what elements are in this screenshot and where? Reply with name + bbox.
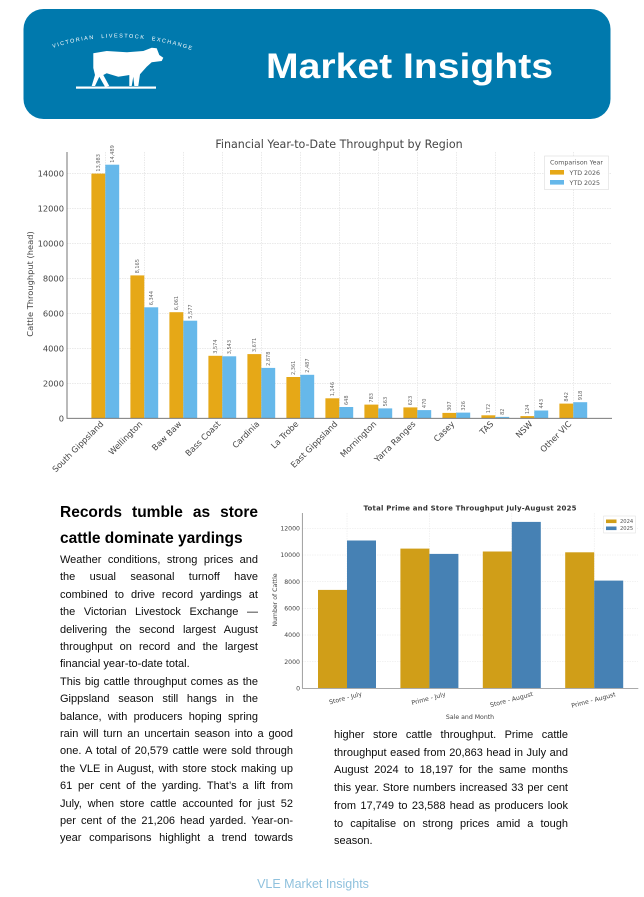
x axis labels: [328, 691, 617, 710]
y axis ticks: 4000: [43, 343, 64, 353]
value labels: 14,489: [110, 145, 116, 163]
x axis region labels: Casey: [432, 419, 456, 444]
article text: left column upper: throughput on record and the largest: [60, 641, 258, 653]
value labels: 648: [344, 395, 350, 405]
y axis ticks: 2000: [43, 378, 64, 388]
article text: left column upper: the Victorian Livestock Exchange —: [60, 606, 258, 618]
x axis region labels: La Trobe: [269, 419, 300, 451]
article text: left column lower: one. A total of 20,579 cattle were sold through: [60, 745, 293, 757]
y axis ticks: 10000: [38, 238, 64, 248]
article text: right column: August 2024 to 18,197 for the same months: [334, 764, 568, 776]
footer: VLE Market Insights: [257, 877, 369, 891]
x axis labels: Store - August: [489, 691, 534, 709]
y axis ticks: 0: [296, 686, 300, 692]
article text: right column: [334, 729, 568, 847]
value labels: 1,146: [330, 382, 336, 396]
legend: 2025: [620, 526, 633, 532]
bar chart: total prime and store throughput: [272, 504, 638, 721]
article text: left column upper: delivering the second largest August: [60, 624, 258, 636]
y axis ticks: 6000: [43, 308, 64, 318]
y axis ticks: 8000: [284, 579, 300, 586]
value labels: 623: [408, 396, 414, 405]
value labels: 2,878: [266, 352, 272, 366]
article text: left column lower: rain will turn an uncertain season into a good: [60, 728, 293, 740]
value labels: 13,983: [96, 154, 102, 172]
x axis region labels: [50, 418, 574, 474]
article heading: Records tumble as store: [60, 504, 258, 521]
y axis ticks: 4000: [284, 632, 300, 639]
value labels: 563: [383, 397, 389, 406]
legend: Comparison Year: [550, 160, 603, 166]
legend: 2024: [620, 519, 634, 525]
article text: left column lower: [60, 728, 293, 844]
article text: left column upper: financial year-to-date total.: [60, 658, 190, 670]
value labels: 783: [369, 393, 375, 403]
value labels: 842: [564, 392, 570, 402]
x axis region labels: Mornington: [338, 419, 378, 459]
y axis ticks: 6000: [284, 606, 300, 612]
value labels: 124: [525, 405, 531, 414]
article text: left column lower: per cent of the 21,206 head yarded. Year-on-: [60, 815, 293, 827]
x axis labels: Prime - August: [571, 691, 617, 710]
x axis region labels: Baw Baw: [150, 419, 184, 453]
value labels: 3,574: [213, 339, 219, 354]
article text: left column lower: 61 per cent of the yarding. That’s a lift from: [60, 780, 293, 792]
bars: YTD 2025: [105, 165, 587, 418]
value labels: 6,344: [149, 291, 155, 305]
article heading: [60, 504, 258, 547]
article text: left column lower: year comparisons highlight a trend towards: [60, 832, 293, 844]
y axis ticks: 12000: [280, 526, 300, 532]
legend: [604, 516, 636, 533]
value labels: 307: [447, 401, 453, 411]
title: Market Insights: [266, 47, 553, 86]
article text: left column upper: balance, with producers hoping spring: [60, 711, 258, 723]
logo: Victorian Livestock Exchange: [52, 34, 192, 89]
x axis region labels: Other VIC: [538, 419, 574, 454]
x axis labels: Prime - July: [411, 691, 447, 707]
y axis ticks: 12000: [38, 203, 64, 213]
value labels: 3,543: [227, 340, 233, 354]
article text: right column: this year. Store numbers increased 33 per cent: [334, 782, 568, 794]
article text: right column: to capitalise on strong prices amid a tough: [334, 818, 568, 830]
axes: [67, 152, 612, 418]
value labels: 8,165: [135, 259, 141, 273]
value labels: 443: [539, 399, 545, 408]
article text: left column lower: July, when store cattle accounted for just 52: [60, 798, 293, 810]
x axis region labels: Yarra Ranges: [371, 419, 417, 465]
article text: left column upper: Weather conditions, strong prices and: [60, 554, 258, 566]
value labels: [96, 145, 584, 415]
value labels: 82: [500, 409, 506, 415]
article text: left column upper: [60, 554, 258, 723]
value labels: 5,577: [188, 304, 194, 319]
article text: right column: season.: [334, 835, 373, 847]
y axis ticks: 8000: [43, 273, 64, 283]
bar chart: financial year-to-date throughput by region: [25, 138, 612, 474]
y axis ticks: 0: [59, 413, 64, 423]
y axis ticks: 10000: [280, 552, 300, 559]
y axis label: Cattle Throughput (head): [25, 231, 35, 337]
chart title: Financial Year-to-Date Throughput by Region: [215, 138, 463, 151]
legend: [544, 156, 608, 190]
value labels: 470: [422, 399, 428, 408]
x axis region labels: South Gippsland: [50, 419, 105, 474]
value labels: 3,671: [252, 338, 258, 352]
article heading: cattle dominate yardings: [60, 530, 243, 547]
x axis region labels: Wellington: [106, 419, 144, 457]
article text: right column: throughput eased from 20,863 head in July and: [334, 747, 568, 759]
x axis region labels: East Gippsland: [288, 419, 339, 470]
x axis title: Sale and Month: [446, 714, 494, 721]
header banner: [24, 9, 610, 119]
chart title: Total Prime and Store Throughput July-August 2025: [364, 504, 577, 512]
value labels: 918: [578, 391, 584, 400]
article text: left column upper: This big cattle throughput comes as the: [60, 676, 258, 688]
value labels: 326: [461, 401, 467, 411]
y axis ticks: [38, 168, 64, 423]
x axis region labels: NSW: [513, 419, 534, 440]
x axis region labels: TAS: [477, 419, 495, 437]
y axis ticks: [280, 526, 300, 692]
value labels: 172: [486, 404, 492, 413]
x axis region labels: Bass Coast: [183, 418, 223, 458]
article text: left column upper: Gippsland season still hangs in the: [60, 693, 258, 705]
logo: Victorian Livestock Exchange: VICTORIAN LIVESTOCK EXCHANGE: [52, 34, 192, 50]
bars: 2025: [347, 522, 623, 688]
legend: YTD 2026: [568, 170, 600, 177]
y axis ticks: 2000: [284, 659, 300, 666]
value labels: 2,361: [291, 361, 297, 375]
value labels: 2,487: [305, 358, 311, 373]
bars: 2024: [318, 549, 594, 688]
y axis label: Number of Cattle: [272, 573, 279, 627]
bars: YTD 2026: [91, 174, 573, 418]
article text: right column: from 17,749 to 23,588 head as producers look: [334, 800, 568, 812]
legend: YTD 2025: [568, 180, 600, 187]
y axis ticks: 14000: [38, 168, 64, 178]
article text: left column lower: the VLE in August, with store stock making up: [60, 763, 293, 775]
x axis labels: Store - July: [328, 691, 363, 706]
axes: [302, 513, 638, 688]
article text: right column: higher store cattle throughput. Prime cattle: [334, 729, 568, 741]
article text: left column upper: the usual seasonal turnoff have: [60, 571, 258, 583]
article text: left column upper: combined to drive record yardings at: [60, 589, 258, 601]
x axis region labels: Cardinia: [230, 419, 261, 450]
value labels: 6,061: [174, 296, 180, 310]
